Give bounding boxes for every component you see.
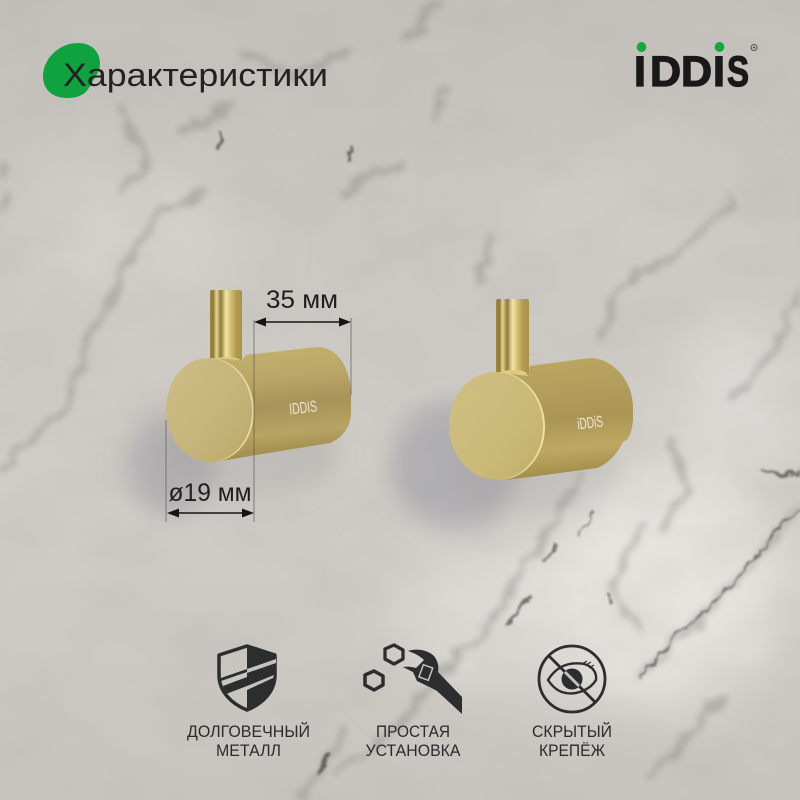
logo registered mark xyxy=(751,44,757,50)
feature: durable metal xyxy=(187,646,310,760)
dimension lines xyxy=(166,318,351,522)
right hook pin xyxy=(496,299,529,378)
label: ДОЛГОВЕЧНЫЙ xyxy=(187,722,310,741)
icon: shield xyxy=(219,646,276,710)
feature: easy installation xyxy=(365,645,462,760)
green blob xyxy=(43,43,100,98)
hook: right xyxy=(446,299,633,482)
dimension: length label: 35 мм xyxy=(266,286,338,314)
label: ПРОСТАЯ xyxy=(376,722,450,741)
left hook face xyxy=(163,356,257,464)
left hook pin xyxy=(210,290,242,365)
right hook body xyxy=(490,358,633,480)
label: КРЕПЁЖ xyxy=(539,741,605,760)
heading text: Характеристики xyxy=(63,57,328,93)
icon: nuts and wrench xyxy=(365,645,462,714)
feature: hidden fastening xyxy=(532,646,612,760)
icon: crossed-out eye xyxy=(539,646,605,712)
left hook body xyxy=(205,347,351,462)
logo letter S: S xyxy=(727,48,749,96)
right hook face xyxy=(446,370,548,482)
dimension: length arrow xyxy=(254,318,351,326)
IDDIS logo xyxy=(634,42,757,96)
heading with green blob xyxy=(43,43,328,98)
label: МЕТАЛЛ xyxy=(216,741,281,760)
hook: left, with dimensions xyxy=(163,286,351,522)
dimension: diameter label: ø19 мм xyxy=(168,479,252,507)
logo wordmark: IDDI xyxy=(634,48,725,96)
right hook logo: iDDiS xyxy=(576,413,604,434)
label: СКРЫТЫЙ xyxy=(532,722,612,741)
logo dots xyxy=(637,42,724,52)
cast shadows xyxy=(128,400,620,530)
left hook logo: IDDIS xyxy=(288,398,318,419)
label: УСТАНОВКА xyxy=(366,741,461,760)
dimension: diameter arrow xyxy=(167,508,254,518)
